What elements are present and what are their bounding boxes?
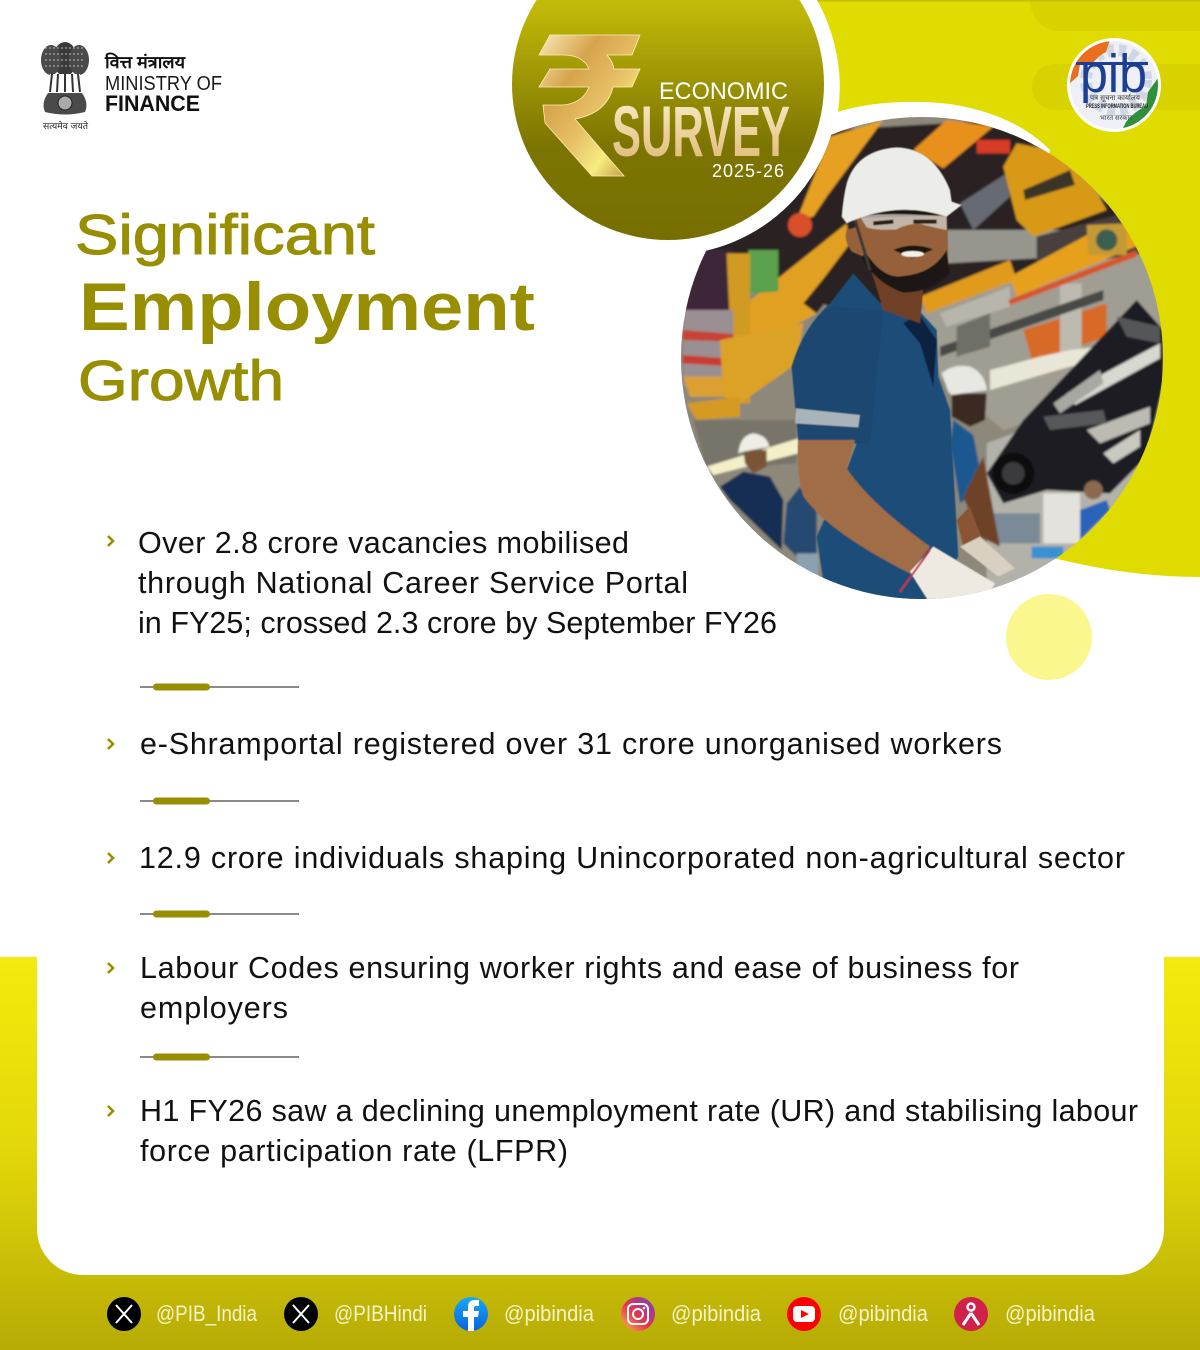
ministry of: MINISTRY OF [105,73,222,95]
decorative pale circle [1006,594,1092,680]
orange beams [797,120,883,220]
economic label: ECONOMIC [659,78,788,105]
handle: PIB Hindi: @PIBHindi [334,1301,427,1326]
logo: PIB [1067,38,1161,132]
icon: Koo [954,1297,988,1331]
wall [920,250,1163,430]
title [75,203,535,413]
finance: FINANCE [105,91,200,116]
bureau label: PRESS INFORMATION BUREAU [1086,104,1148,110]
handle: Facebook: @pibindia [504,1301,595,1326]
title line 2: Employment [79,269,535,345]
third worker [720,472,783,550]
title line 1: Significant [75,203,375,267]
icon: gold rupee symbol [539,35,640,176]
bullet list [108,526,1138,1168]
factory floor right [985,387,1161,590]
bottom yellow frame [0,957,1200,1350]
survey label: SURVEY [612,93,790,172]
handle: Instagram: @pibindia [671,1301,762,1326]
handle: Koo: @pibindia [1005,1301,1096,1326]
bullet 2: e-Shramportal registered over 31 crore unorganised workers [140,727,1002,761]
bullet 4: employers [140,991,288,1025]
icon: X Hindi [284,1297,318,1331]
ministry name hindi: वित्त मंत्रालय [104,52,186,72]
bullet 4: Labour Codes ensuring worker rights and ease of business for [140,951,1019,985]
bullet 5: H1 FY26 saw a declining unemployment rate (UR) and stabilising labour [140,1094,1138,1128]
icon: national emblem: सत्यमेव जयते [43,120,89,131]
photo: factory worker [670,110,1170,610]
white ring around badge [497,0,839,255]
pib letters: pib [1080,44,1147,104]
second worker [951,420,980,504]
bullet 3: 12.9 crore individuals shaping Unincorporated non-agricultural sector [139,841,1125,875]
bullet 1 [108,526,777,640]
logo: Ministry of Finance [41,42,222,131]
year label: 2025-26 [712,161,784,181]
handle: YouTube: @pibindia [838,1301,929,1326]
man [792,147,1015,603]
top right yellow shape [816,0,1200,577]
title line 3: Growth [78,349,284,413]
icon: national emblem [41,42,89,131]
badge: Economic Survey [512,0,824,240]
social media bar [107,1297,1096,1331]
icon: Instagram [621,1297,655,1331]
hindi label: पत्र सूचना कार्यालय [1090,93,1141,102]
bullet 1: in FY25; crossed 2.3 crore by September FY26 [138,606,777,640]
bullet 1: Over 2.8 crore vacancies mobilised [138,526,629,560]
bullet 5: force participation rate (LFPR) [140,1134,568,1168]
icon: YouTube [787,1297,821,1331]
white content panel [37,900,1164,1275]
hindi government label: भारत सरकार [1100,115,1132,122]
bullet 4 [108,951,1019,1025]
handle: PIB India: @PIB_India [156,1301,258,1326]
icon: Facebook [454,1297,488,1331]
icon: X [107,1297,141,1331]
bullet 5 [108,1094,1138,1168]
bullet 1: through National Career Service Portal [138,566,688,600]
ceiling [706,122,1117,306]
left hoist and stripes [748,250,778,293]
